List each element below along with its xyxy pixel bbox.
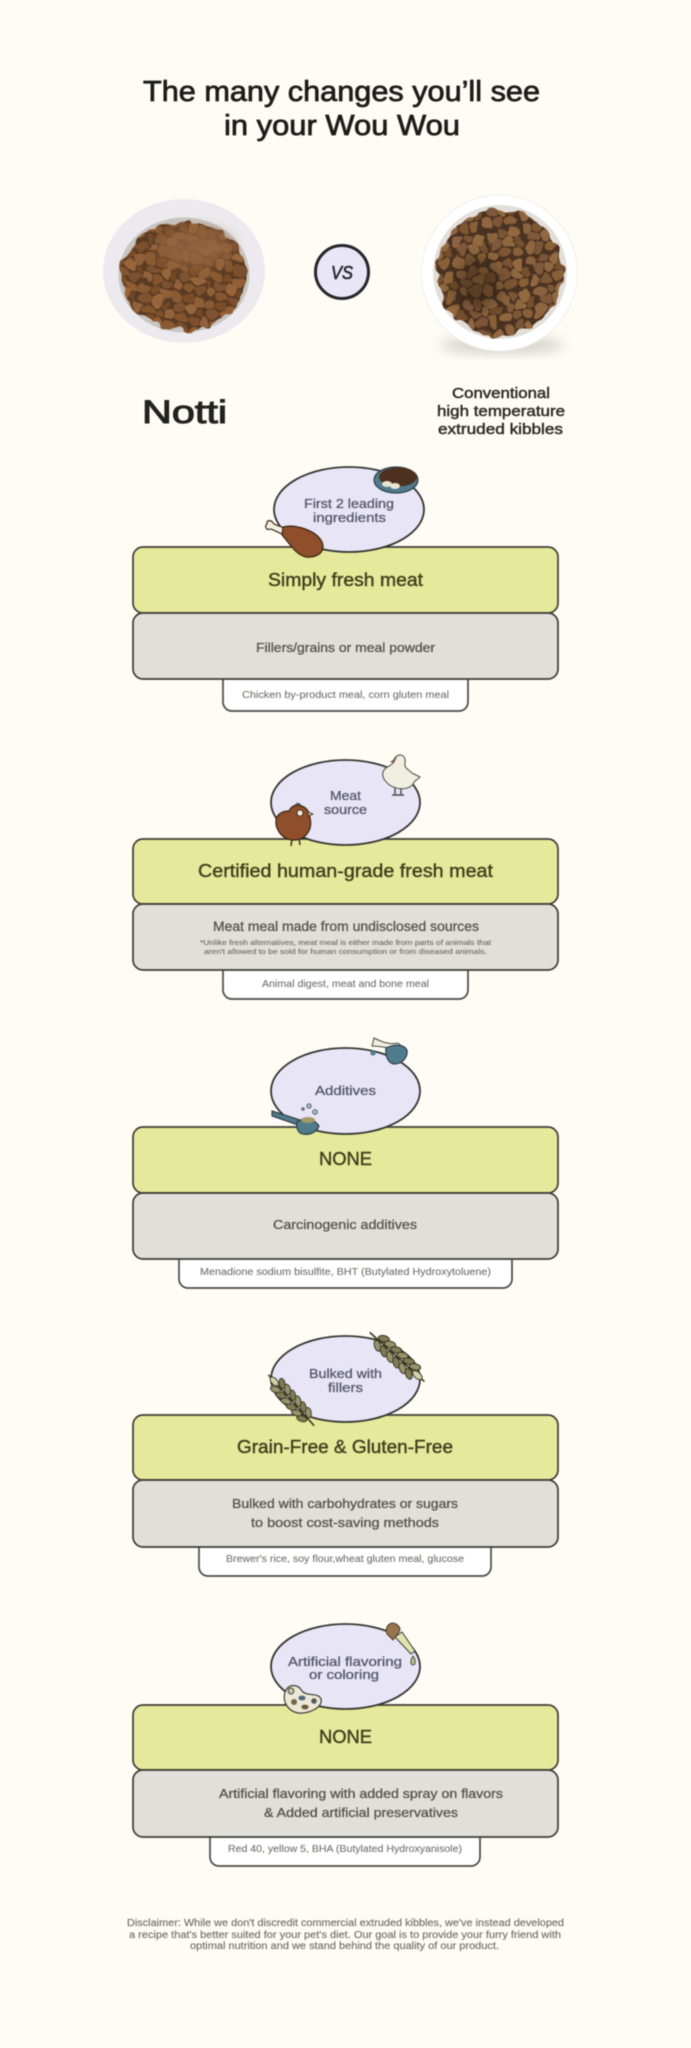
text: simply fresh meat: Simply fresh meat	[268, 569, 423, 590]
text: tag: Brewer's rice, soy flour,wheat gluten meal, glucose	[226, 1553, 464, 1565]
conventional row: bulked	[133, 1480, 558, 1547]
notti row: none	[133, 1705, 558, 1770]
text: artificial flavoring	[219, 1786, 504, 1820]
icon: chicken drumstick	[266, 521, 323, 557]
disclaimer: Disclaimer: While we don't discredit commercial extruded kibbles, we've instead developed	[127, 1918, 564, 1929]
left bowl: Notti food	[103, 199, 265, 343]
text: grain-free: Grain-Free & Gluten-Free	[237, 1436, 453, 1457]
text: footnote: *Unlike fresh alternatives, meat meal is either made from parts of animals that	[200, 938, 492, 947]
text: none: NONE	[319, 1726, 372, 1747]
label: conventional kibbles	[437, 386, 565, 438]
tag: menadione	[179, 1240, 512, 1288]
text: footnote: aren't allowed to be sold for human consumption or from diseased animals.	[204, 947, 487, 956]
text: artificial flavoring: Artificial flavoring with added spray on flavors	[219, 1786, 504, 1801]
panel: meat source	[133, 755, 558, 999]
tag: animal digest	[223, 950, 468, 999]
panel: bulked with fillers	[133, 1325, 558, 1576]
bubble label	[288, 1654, 402, 1682]
icon: goose	[383, 755, 420, 795]
bubble label	[304, 496, 394, 525]
text: artificial flavoring: & Added artificial preservatives	[264, 1805, 459, 1820]
icon: pouring bowl	[370, 1038, 407, 1064]
label: conventional kibbles: extruded kibbles	[438, 422, 563, 438]
disclaimer	[127, 1918, 564, 1952]
conventional row: meat meal	[133, 904, 558, 970]
bubble label: Meat	[330, 788, 361, 803]
icon: bowl of meat	[374, 467, 418, 493]
disclaimer: a recipe that's better suited for your pet's diet. Our goal is to provide your furry friend with	[129, 1930, 561, 1941]
icon: wheat right	[363, 1325, 431, 1389]
text: bulked	[232, 1496, 459, 1530]
notti row: certified human-grade	[133, 839, 558, 904]
tag: chicken by-product	[223, 660, 468, 711]
right bowl: conventional kibble	[422, 195, 578, 354]
title: in your Wou Wou	[224, 110, 460, 142]
text: tag: Animal digest, meat and bone meal	[262, 978, 429, 990]
notti row: grain-free	[133, 1415, 558, 1480]
icon: palette	[284, 1686, 321, 1713]
text: carcinogenic: Carcinogenic additives	[273, 1217, 418, 1232]
bubble label: Bulked with	[309, 1366, 382, 1381]
bubble: artificial flavoring	[271, 1624, 420, 1709]
bubble label: Additives	[315, 1083, 377, 1098]
tag: red 40	[210, 1820, 480, 1866]
icon: scoop	[272, 1104, 319, 1134]
text: bulked: to boost cost-saving methods	[251, 1515, 440, 1530]
bubble label	[309, 1366, 382, 1395]
text: bulked: Bulked with carbohydrates or sugars	[232, 1496, 459, 1511]
conventional row: carcinogenic	[133, 1193, 558, 1259]
bubble: first 2 leading ingredients	[274, 467, 424, 552]
tag: brewers rice	[199, 1530, 491, 1576]
bubble label: fillers	[328, 1380, 364, 1395]
bubble label: or coloring	[309, 1667, 379, 1682]
panel: artificial flavoring or coloring	[133, 1623, 558, 1866]
text: tag: Red 40, yellow 5, BHA (Butylated Hydroxyanisole)	[228, 1843, 462, 1855]
vs badge: VS	[331, 263, 353, 283]
bubble label: First 2 leading	[304, 496, 394, 511]
label: conventional kibbles: high temperature	[437, 404, 565, 420]
icon: wheat left	[261, 1368, 321, 1432]
text: certified: Certified human-grade fresh meat	[198, 860, 493, 881]
icon: hen	[276, 803, 313, 846]
logo: Notti: Notti	[142, 394, 227, 430]
bubble: bulked with fillers	[271, 1336, 420, 1422]
text: tag: Menadione sodium bisulfite, BHT (Butylated Hydroxytoluene)	[200, 1266, 491, 1278]
text: footnote	[200, 938, 492, 956]
text: none: NONE	[319, 1148, 372, 1169]
notti row: simply fresh meat	[133, 547, 558, 613]
bubble: meat source	[271, 760, 420, 845]
text: fillers: Fillers/grains or meal powder	[256, 640, 436, 655]
disclaimer: optimal nutrition and we stand behind the quality of our product.	[190, 1941, 499, 1952]
panel: additives	[133, 1038, 558, 1288]
icon: dropper	[386, 1623, 415, 1665]
panel: first 2 leading ingredients	[133, 467, 558, 711]
label: conventional kibbles: Conventional	[452, 386, 550, 402]
bubble label: source	[324, 802, 367, 817]
bubble label	[324, 788, 367, 817]
conventional row: fillers	[133, 613, 558, 679]
vs badge	[316, 246, 368, 298]
title: The many changes you’ll see	[143, 76, 540, 108]
notti row: none	[133, 1127, 558, 1193]
text: tag: Chicken by-product meal, corn gluten meal	[242, 689, 449, 701]
bubble: additives	[271, 1048, 420, 1134]
bubble label: ingredients	[313, 510, 387, 525]
bubble label: Artificial flavoring	[288, 1654, 402, 1669]
conventional row: artificial flavoring	[133, 1770, 558, 1837]
text: meat meal: Meat meal made from undisclosed sources	[213, 918, 479, 934]
title	[143, 76, 540, 142]
